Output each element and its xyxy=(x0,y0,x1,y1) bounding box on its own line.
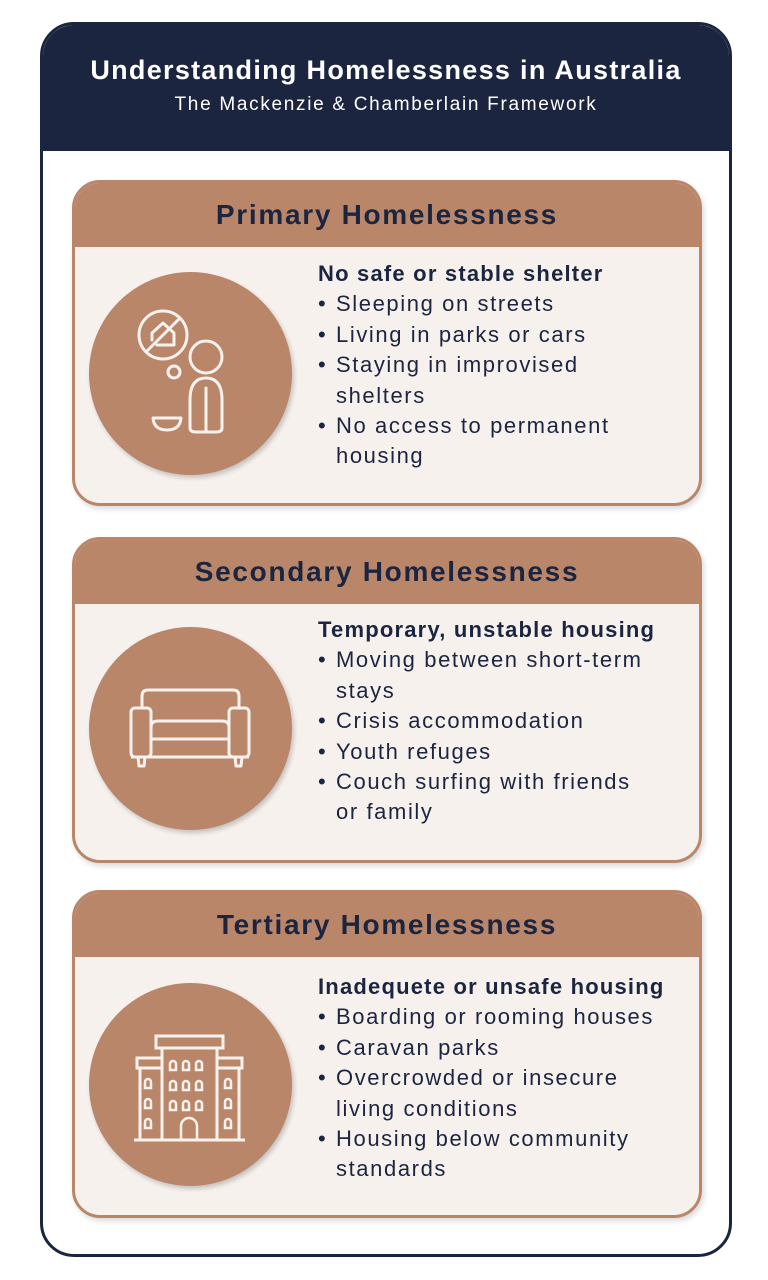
text: primary: Staying in improvised xyxy=(336,352,579,377)
panel: primary xyxy=(72,180,702,506)
text: tertiary: Boarding or rooming houses xyxy=(336,1004,654,1029)
text: tertiary xyxy=(318,974,665,1181)
title: Understanding Homelessness in Australia xyxy=(90,55,682,85)
heading: tertiary: Tertiary Homelessness xyxy=(217,909,557,940)
text: secondary: Youth refuges xyxy=(336,739,492,764)
text: tertiary: Inadequete or unsafe housing xyxy=(318,974,665,999)
text: tertiary: Housing below community xyxy=(336,1126,630,1151)
heading: primary: Primary Homelessness xyxy=(216,199,558,230)
text: primary: Sleeping on streets xyxy=(336,291,555,316)
panel: tertiary xyxy=(72,890,702,1218)
header xyxy=(43,25,729,151)
heading: secondary xyxy=(75,540,699,604)
heading: primary xyxy=(75,183,699,247)
text: tertiary: living conditions xyxy=(336,1096,519,1121)
text: primary: shelters xyxy=(336,383,426,408)
icon: couch xyxy=(89,627,292,830)
text: tertiary: Overcrowded or insecure xyxy=(336,1065,619,1090)
text: primary: housing xyxy=(336,443,424,468)
icon: building xyxy=(89,983,292,1186)
heading: tertiary xyxy=(75,893,699,957)
text: tertiary: standards xyxy=(336,1156,447,1181)
heading: secondary: Secondary Homelessness xyxy=(195,556,579,587)
icon: homeless person xyxy=(89,272,292,475)
text: primary: Living in parks or cars xyxy=(336,322,587,347)
text: secondary: Couch surfing with friends xyxy=(336,769,631,794)
subtitle: The Mackenzie & Chamberlain Framework xyxy=(174,94,597,115)
panel: secondary xyxy=(72,537,702,863)
text: primary: No access to permanent xyxy=(336,413,610,438)
text: secondary: Crisis accommodation xyxy=(336,708,584,733)
text: secondary: or family xyxy=(336,799,434,824)
text: secondary: stays xyxy=(336,678,395,703)
text: primary xyxy=(318,261,610,468)
text: primary: No safe or stable shelter xyxy=(318,261,604,286)
text: secondary: Temporary, unstable housing xyxy=(318,617,655,642)
text: secondary: Moving between short-term xyxy=(336,647,643,672)
text: secondary xyxy=(318,617,655,824)
text: tertiary: Caravan parks xyxy=(336,1035,500,1060)
